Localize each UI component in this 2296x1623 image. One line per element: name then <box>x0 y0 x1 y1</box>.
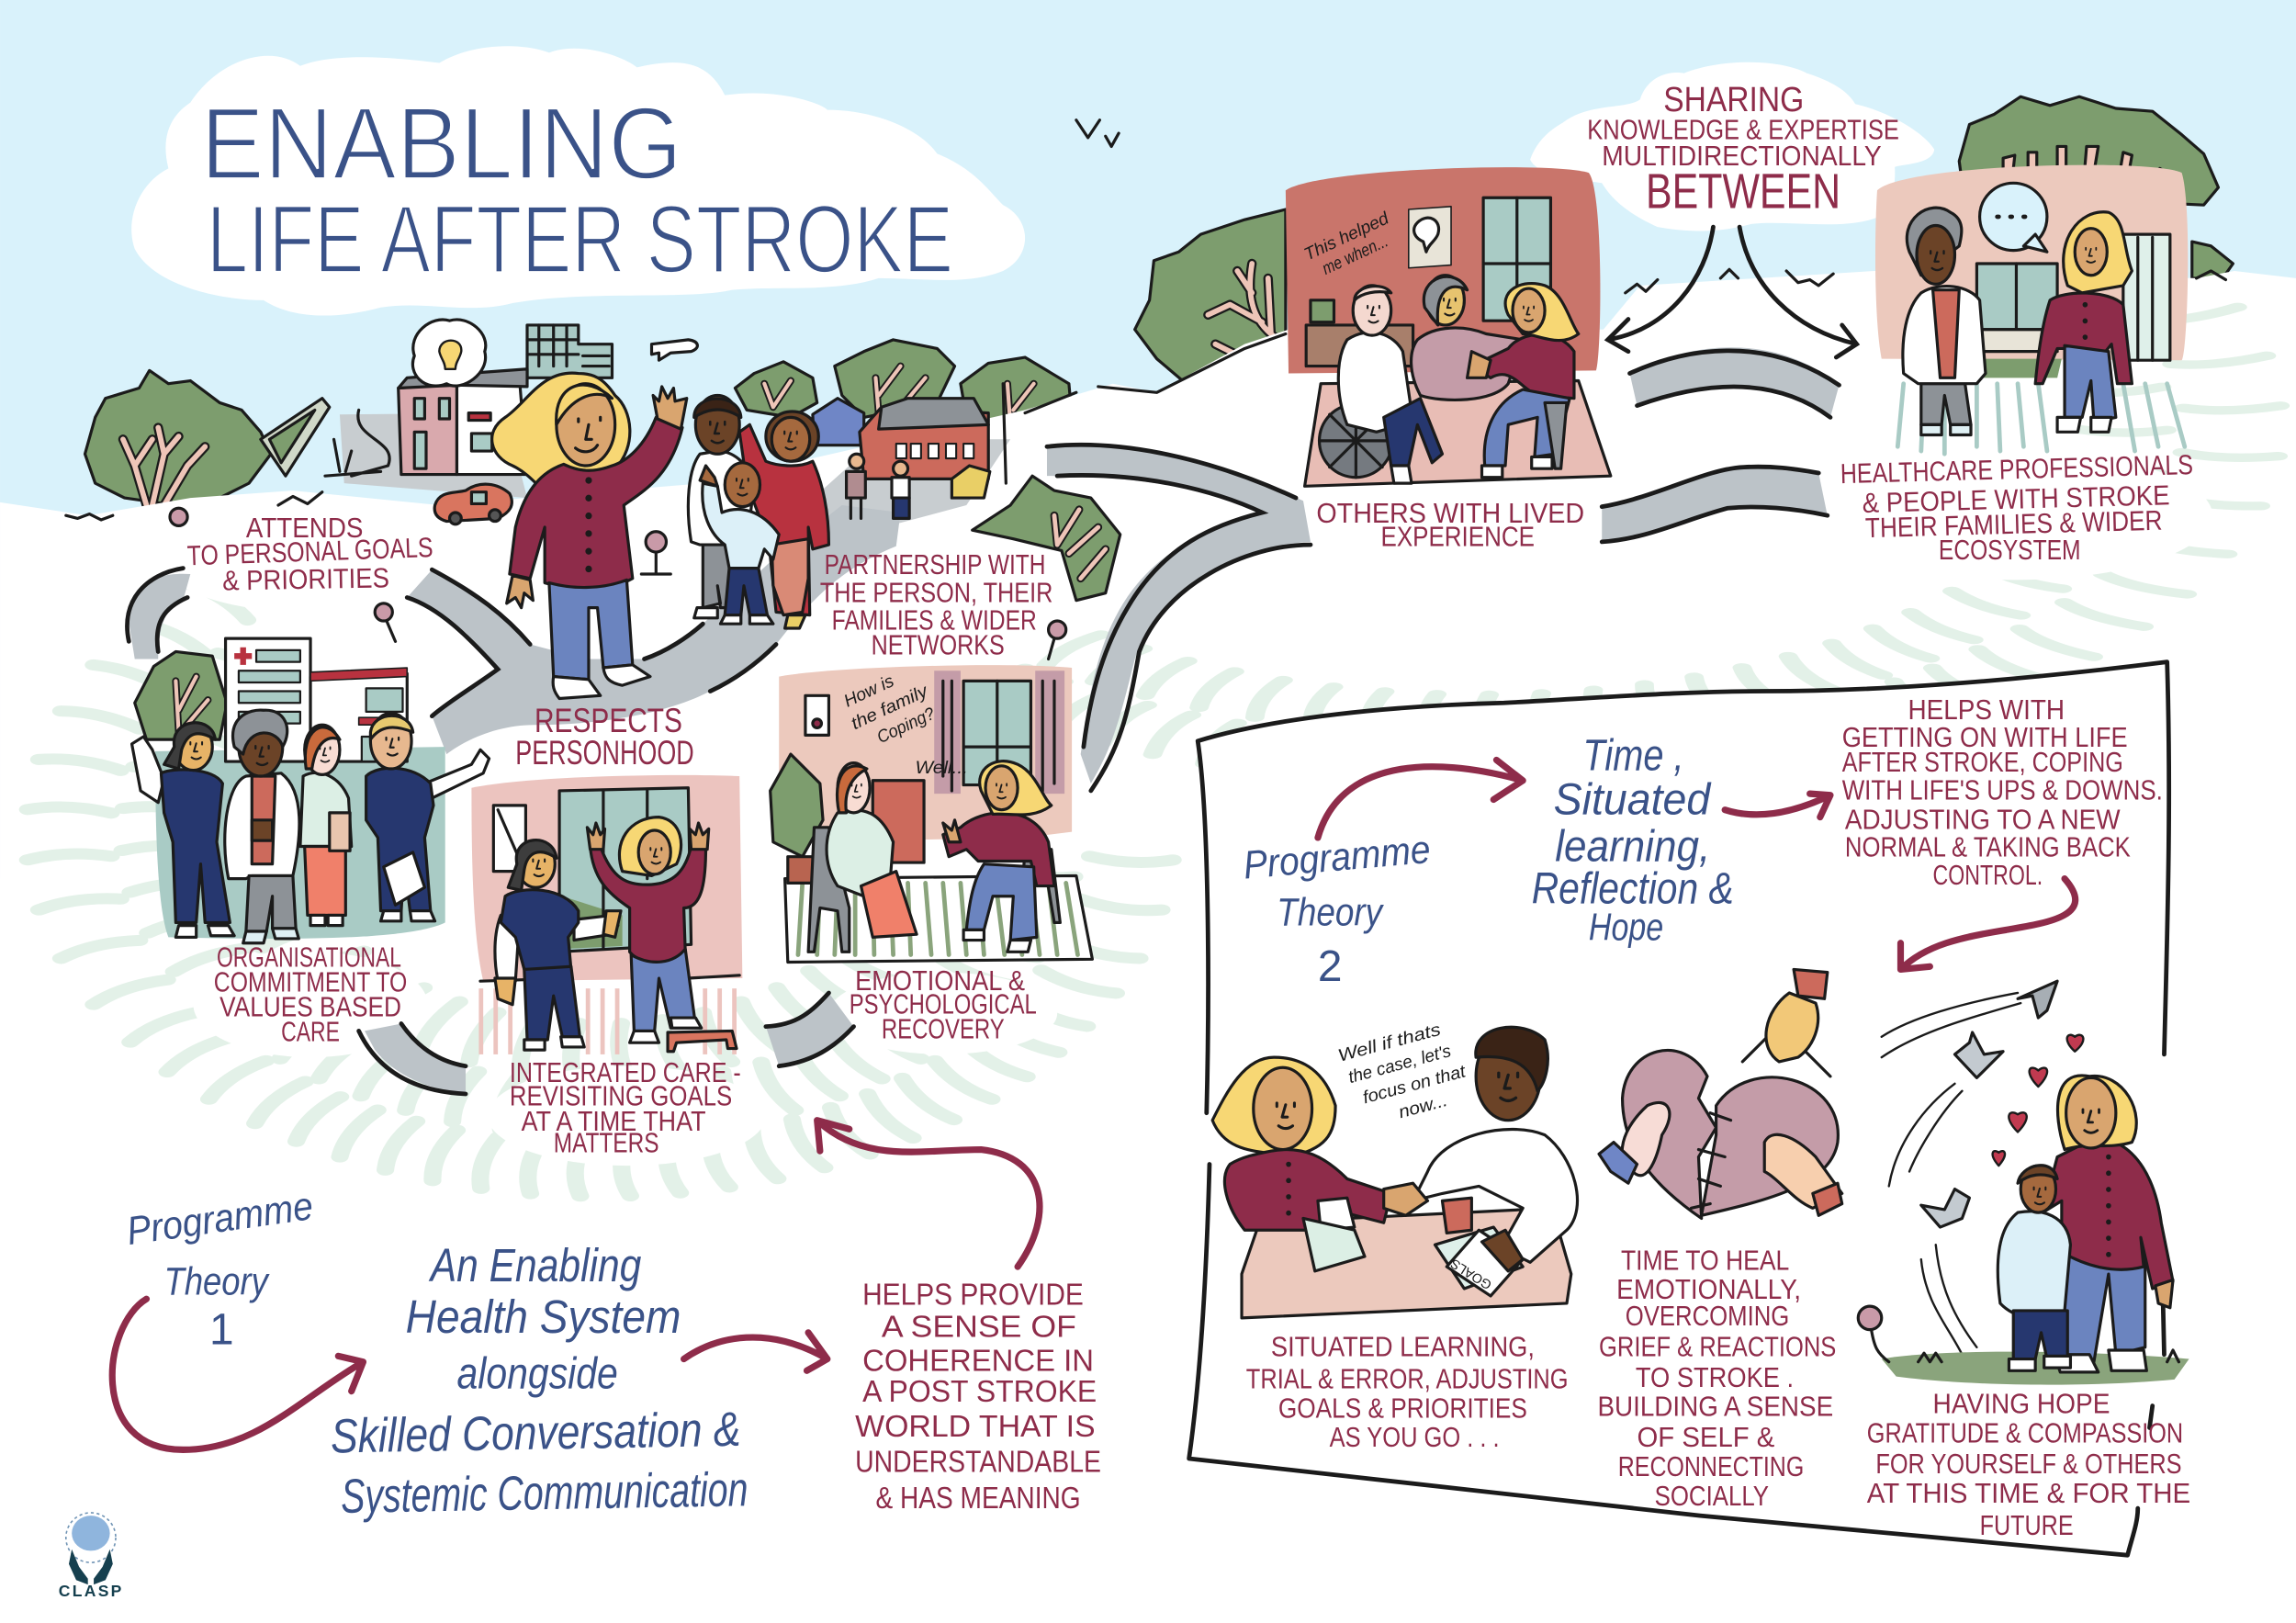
label: attends to personal goals: & PRIORITIES <box>222 563 389 597</box>
label: sharing between: SHARING <box>1663 80 1804 119</box>
icon: stitched broken heart with hands <box>1599 969 1842 1218</box>
speech: well if thats the case: Well if thats <box>1336 1020 1444 1066</box>
label: organisational commitment: CARE <box>281 1018 340 1048</box>
scene: handshake over table <box>1212 1027 1577 1318</box>
label: having hope: FOR YOURSELF & OTHERS <box>1875 1449 2182 1480</box>
arrow: programme theory 2 to time <box>1318 760 1523 838</box>
logo: CLASP: CLASP <box>59 1582 122 1600</box>
speech: how is the family coping: the family <box>849 682 932 734</box>
heading: programme theory 1 <box>124 1184 316 1355</box>
label: time to heal: RECONNECTING <box>1618 1452 1804 1482</box>
label: healthcare professionals: ECOSYSTEM <box>1939 535 2081 566</box>
heading: programme theory 1: Programme <box>124 1184 316 1254</box>
label: helps provide a sense of coherence: HELPS PROVIDE <box>862 1279 1084 1313</box>
label: time to heal: OF SELF & <box>1638 1423 1774 1453</box>
arrows: sharing between <box>1608 227 1857 357</box>
label: having hope: GRATITUDE & COMPASSION <box>1867 1418 2183 1448</box>
label: helps with getting on <box>1842 695 2163 891</box>
speech: how is the family coping: Coping? <box>874 704 939 748</box>
label: attends to personal goals <box>186 513 433 597</box>
text: time situated learning: Reflection & <box>1532 865 1734 914</box>
text: time situated learning <box>1532 732 1734 949</box>
text: time situated learning: learning, <box>1555 822 1710 871</box>
text: time situated learning: Time , <box>1583 732 1684 781</box>
tree: upper left <box>85 370 271 505</box>
sharing cloud <box>1530 62 1934 231</box>
label: integrated care: INTEGRATED CARE - <box>510 1058 741 1088</box>
label: having hope <box>1867 1390 2190 1541</box>
heading: programme theory 2: Programme <box>1242 828 1432 888</box>
trees: behind the houses <box>735 340 1072 432</box>
label: respects personhood <box>515 702 694 772</box>
label: organisational commitment: ORGANISATIONAL <box>217 942 401 973</box>
label: partnership: NETWORKS <box>872 631 1005 661</box>
panel: integrated care <box>471 775 742 1054</box>
speech: this helped me when: me when... <box>1320 231 1391 279</box>
label: sharing between: BETWEEN <box>1646 163 1840 219</box>
label: others with lived experience <box>1316 499 1584 553</box>
label: others with lived experience: EXPERIENCE <box>1380 523 1535 553</box>
icon: birds and hearts <box>1882 981 2083 1355</box>
label: integrated care: REVISITING GOALS <box>510 1082 732 1112</box>
icon: flowers <box>170 508 1066 659</box>
tree: upper right <box>1959 96 2218 205</box>
text: enabling health system: alongside <box>456 1349 618 1398</box>
label: respects personhood: RESPECTS <box>535 702 682 739</box>
arrow: programme theory 1 loop <box>112 1299 363 1449</box>
panel: others with lived experience <box>1286 167 1611 486</box>
speech: this helped me when <box>1301 209 1401 284</box>
label: helps provide a sense of coherence: UNDERSTANDABLE <box>855 1445 1101 1479</box>
label: emotional recovery: RECOVERY <box>882 1014 1005 1044</box>
label: sharing between: KNOWLEDGE & EXPERTISE <box>1587 115 1899 145</box>
label: helps with getting on: NORMAL & TAKING BACK <box>1845 833 2131 863</box>
label: attends to personal goals: TO PERSONAL GOALS <box>186 533 433 571</box>
label: helps provide a sense of coherence: COHERENCE IN <box>862 1344 1094 1378</box>
scene: woman and child with hope <box>1858 1076 2189 1385</box>
tree: small right edge <box>2192 242 2233 278</box>
arrow: enabling system to coherence <box>684 1333 827 1370</box>
road: left bend <box>127 569 190 659</box>
speech: how is the family coping <box>838 659 942 755</box>
label: integrated care: AT A TIME THAT <box>522 1107 706 1137</box>
label: partnership: THE PERSON, THEIR <box>820 578 1052 608</box>
heading: programme theory 2: 2 <box>1318 942 1343 991</box>
speech: well if thats the case: the case, let's <box>1346 1042 1454 1088</box>
icon: birds in sky <box>1076 120 1119 146</box>
label: helps with getting on: HELPS WITH <box>1908 695 2065 726</box>
panel: town scene with buildings <box>261 320 697 524</box>
label: situated learning <box>1246 1332 1569 1453</box>
label: time to heal: SOCIALLY <box>1655 1482 1769 1512</box>
speech: well: Well... <box>916 759 968 778</box>
title: ENABLING <box>200 86 682 201</box>
label: helps provide a sense of coherence: A POST STROKE <box>862 1375 1097 1409</box>
road: lower link between panels <box>1602 467 1828 542</box>
label: organisational commitment <box>214 942 407 1048</box>
panel: organisational commitment team <box>132 638 490 943</box>
label: partnership: PARTNERSHIP WITH <box>825 550 1045 580</box>
label: time to heal: EMOTIONALLY, <box>1616 1275 1801 1305</box>
label: attends to personal goals: ATTENDS <box>246 513 363 544</box>
label: organisational commitment: COMMITMENT TO <box>214 967 407 997</box>
horizon lines <box>66 269 2225 520</box>
panel: emotional and psychological recovery <box>771 665 1092 962</box>
speech: this helped me when: This helped <box>1301 209 1393 265</box>
label: time to heal: GRIEF & REACTIONS <box>1599 1332 1836 1362</box>
label: partnership: FAMILIES & WIDER <box>832 606 1037 637</box>
label: helps with getting on: CONTROL. <box>1933 861 2043 891</box>
text: enabling health system: Health System <box>406 1291 681 1343</box>
label: helps with getting on: ADJUSTING TO A NEW <box>1845 805 2121 835</box>
road: sweeping road to others with lived experience <box>1047 445 1311 791</box>
panel: red houses <box>813 384 1006 518</box>
arrow: helps to scenes <box>1900 879 2076 969</box>
arrow: coherence to scene <box>817 1121 1040 1267</box>
label: helps with getting on: AFTER STROKE, COPING <box>1842 748 2123 778</box>
label: respects personhood: PERSONHOOD <box>515 734 694 772</box>
text: enabling health system: Skilled Conversation & <box>331 1403 741 1464</box>
text: time situated learning: Situated <box>1554 775 1712 824</box>
tree: centre right <box>1135 209 1286 384</box>
heading: programme theory 2: Theory <box>1277 891 1384 935</box>
label: time to heal: BUILDING A SENSE <box>1597 1392 1833 1423</box>
label: helps provide a sense of coherence <box>855 1279 1101 1516</box>
label: partnership <box>820 550 1052 661</box>
label: healthcare professionals: HEALTHCARE PROFESSIONALS <box>1840 450 2193 490</box>
panel: programme theory 2 box <box>1189 662 2169 1555</box>
label: time to heal: OVERCOMING <box>1626 1302 1789 1332</box>
label: having hope: FUTURE <box>1980 1511 2074 1541</box>
sky background <box>0 0 2296 879</box>
label: sharing between: MULTIDIRECTIONALLY <box>1602 141 1882 172</box>
label: integrated care: MATTERS <box>554 1129 658 1159</box>
speech: well if thats the case: focus on that <box>1361 1062 1469 1108</box>
text: enabling health system: Systemic Communication <box>341 1462 748 1524</box>
text: goals sheet: GOALS <box>1448 1256 1494 1292</box>
label: helps provide a sense of coherence: & HAS MEANING <box>875 1482 1081 1516</box>
label: organisational commitment: VALUES BASED <box>219 992 401 1022</box>
label: time to heal: TO STROKE . <box>1636 1363 1794 1393</box>
tree: partnership <box>973 476 1120 601</box>
logo: CLASP <box>59 1513 122 1600</box>
label: helps with getting on: WITH LIFE'S UPS & DOWNS. <box>1842 776 2163 806</box>
text: enabling health system <box>331 1239 748 1524</box>
road: central road under the person <box>407 505 901 754</box>
label: situated learning: GOALS & PRIORITIES <box>1278 1393 1527 1424</box>
label: having hope: AT THIS TIME & FOR THE <box>1867 1479 2190 1509</box>
label: healthcare professionals <box>1840 450 2193 566</box>
label: sharing between <box>1587 80 1899 219</box>
label: emotional recovery: PSYCHOLOGICAL <box>850 989 1037 1020</box>
road: lower left stub <box>359 1023 466 1094</box>
label: having hope: HAVING HOPE <box>1933 1390 2110 1420</box>
speech: well if thats the case: now... <box>1397 1091 1450 1122</box>
label: time to heal <box>1597 1245 1836 1512</box>
road: upper link between panels <box>1630 347 1840 417</box>
label: integrated care <box>510 1058 741 1159</box>
label: healthcare professionals: THEIR FAMILIES & WIDER <box>1865 506 2163 544</box>
label: others with lived experience: OTHERS WITH LIVED <box>1316 499 1584 529</box>
heading: programme theory 2 <box>1242 828 1432 991</box>
arrow: time to helps <box>1725 794 1830 817</box>
title cloud <box>131 46 1025 316</box>
people: family group <box>688 395 828 628</box>
person: main woman waving <box>492 373 687 698</box>
label: emotional recovery <box>850 966 1037 1044</box>
label: healthcare professionals: & PEOPLE WITH STROKE <box>1862 480 2170 519</box>
road: lower right stub <box>766 993 854 1066</box>
title: LIFE AFTER STROKE <box>207 186 953 294</box>
background road behind the town <box>340 413 1010 535</box>
label: situated learning: AS YOU GO . . . <box>1330 1423 1500 1453</box>
title <box>200 86 953 294</box>
label: helps with getting on: GETTING ON WITH LIFE <box>1842 723 2128 753</box>
label: helps provide a sense of coherence: WORLD THAT IS <box>855 1410 1096 1444</box>
panel: healthcare professionals and people with stroke <box>1875 165 2188 454</box>
heading: programme theory 1: Theory <box>164 1259 270 1303</box>
label: situated learning: TRIAL & ERROR, ADJUSTING <box>1246 1364 1569 1394</box>
label: time to heal: TIME TO HEAL <box>1621 1245 1789 1276</box>
text: time situated learning: Hope <box>1589 906 1663 949</box>
text: enabling health system: An Enabling <box>428 1239 641 1291</box>
label: situated learning: SITUATED LEARNING, <box>1271 1332 1535 1362</box>
label: helps provide a sense of coherence: A SENSE OF <box>882 1311 1076 1345</box>
label: emotional recovery: EMOTIONAL & <box>855 966 1025 997</box>
heading: programme theory 1: 1 <box>209 1306 234 1355</box>
speech: well if thats the case <box>1336 1017 1474 1134</box>
speech: how is the family coping: How is <box>841 671 897 712</box>
